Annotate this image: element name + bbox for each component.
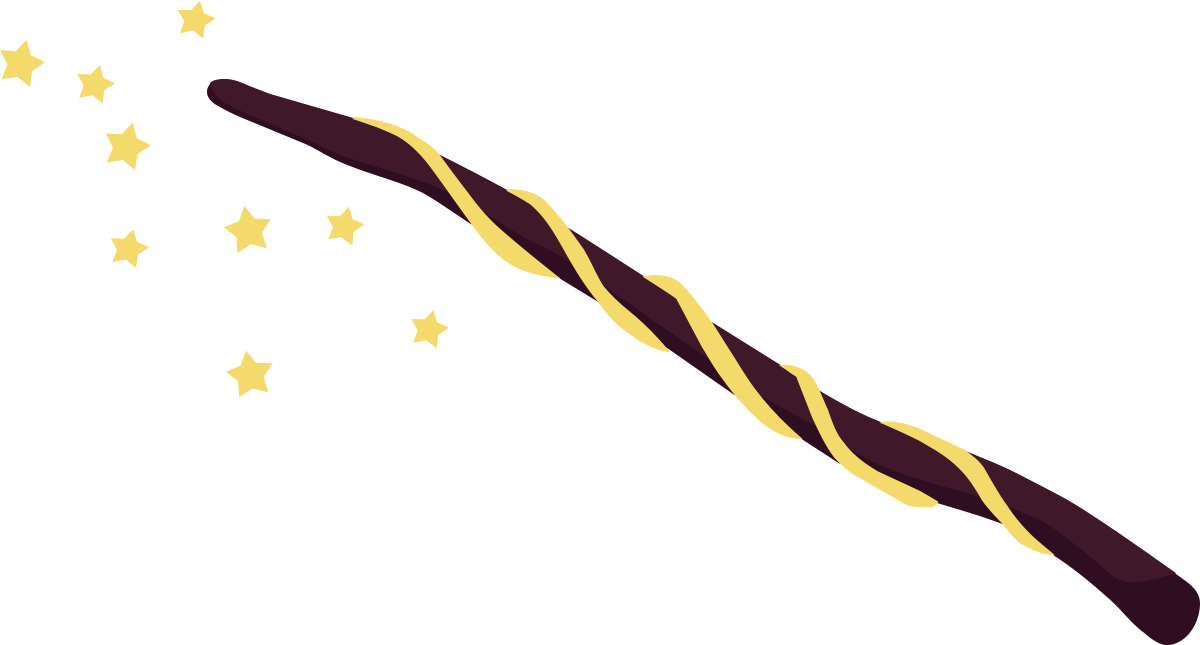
stars cluster [0, 1, 449, 397]
star 2 [77, 65, 115, 103]
star 3 [106, 123, 151, 170]
star 7 [327, 207, 364, 246]
ribbon twist 3 [645, 276, 800, 438]
wand shadow body [207, 79, 1200, 645]
ribbon twist 1 [353, 118, 557, 277]
ribbon wrapped around wand [353, 118, 1052, 554]
ribbon twist 2 [507, 190, 668, 351]
wand lit surface [210, 79, 1176, 582]
star 6 [224, 206, 271, 253]
star 5 [111, 229, 149, 268]
wand [207, 79, 1200, 645]
star 4 [178, 1, 216, 38]
star 1 [0, 40, 45, 87]
ribbon twist 4 [782, 366, 937, 506]
ribbon twist 5 [883, 422, 1052, 554]
star 8 [411, 310, 449, 348]
star 9 [226, 351, 272, 397]
